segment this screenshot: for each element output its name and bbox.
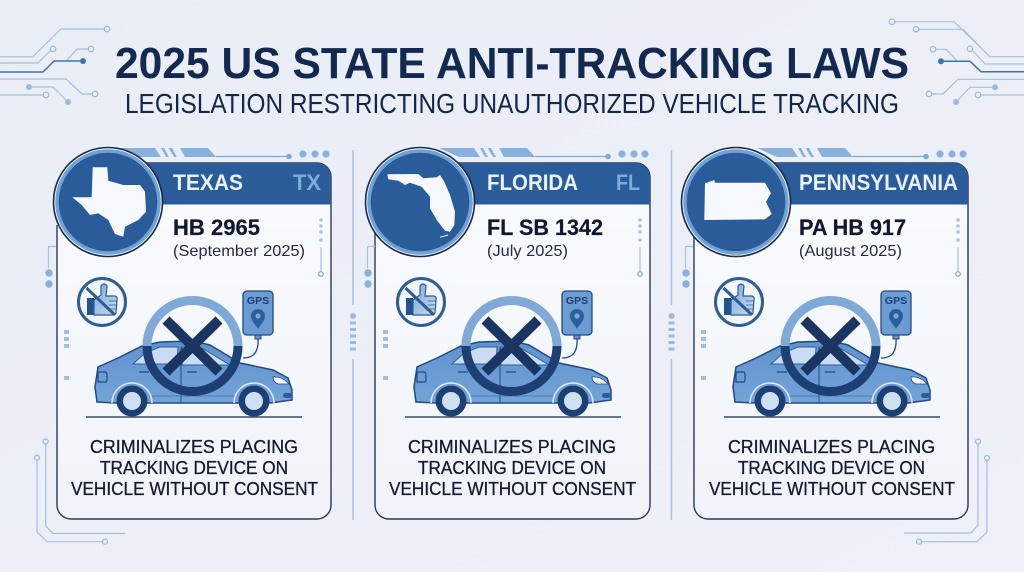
Pennsylvania card ornaments [682,148,967,380]
circuit decoration: bottom right [904,439,990,544]
Texas bill number: HB 2965 [173,215,260,240]
circuit decoration: top right [889,19,1024,105]
Pennsylvania header band [736,163,968,204]
title: 2025 US STATE ANTI-TRACKING LAWS [115,39,909,88]
GPS label: GPS [885,295,907,307]
icon: car with crossed-out GPS tracker [405,291,621,417]
Florida state name: FLORIDA [487,170,578,195]
Florida effective date: (July 2025) [487,243,568,260]
divider between Texas and Florida [350,150,356,520]
Pennsylvania description [709,437,955,499]
icon: car with crossed-out GPS tracker [86,291,302,417]
Florida header band [420,163,650,204]
panel: Texas [45,148,331,519]
Texas abbreviation: TX [293,170,321,195]
Florida bill number: FL SB 1342 [487,215,603,240]
Texas header band [108,163,331,204]
icon: car with crossed-out GPS tracker [724,291,940,417]
Pennsylvania description: VEHICLE WITHOUT CONSENT [709,479,955,499]
GPS label: GPS [247,295,269,307]
panel: Florida [364,148,650,519]
Texas card ornaments [45,148,330,380]
Florida description: CRIMINALIZES PLACING [408,437,616,457]
Texas card body [57,163,331,519]
Pennsylvania bill number: PA HB 917 [799,215,906,240]
icon: no thumbs up [716,278,762,326]
Pennsylvania card body [694,163,968,519]
Pennsylvania description: CRIMINALIZES PLACING [728,437,935,457]
Texas effective date: (September 2025) [173,243,305,260]
icon: Florida state badge [366,148,474,256]
Pennsylvania description: TRACKING DEVICE ON [738,458,925,478]
Florida description: TRACKING DEVICE ON [418,458,606,478]
Florida card body [375,163,650,519]
icon: Pennsylvania state badge [682,148,790,256]
GPS label: GPS [566,295,588,307]
Florida description [389,437,636,499]
subtitle: LEGISLATION RESTRICTING UNAUTHORIZED VEHICLE TRACKING [125,88,899,119]
Florida card ornaments [364,148,649,380]
Texas description: TRACKING DEVICE ON [100,458,288,478]
Pennsylvania state name: PENNSYLVANIA [799,170,958,195]
Texas description [71,437,318,499]
Pennsylvania effective date: (August 2025) [799,243,902,260]
icon: no thumbs up [78,278,126,326]
panel: Pennsylvania [682,148,968,519]
icon: no thumbs up [398,278,444,326]
Texas description: VEHICLE WITHOUT CONSENT [71,479,318,499]
circuit decoration: bottom left [34,439,125,544]
Texas description: CRIMINALIZES PLACING [90,437,298,457]
circuit decoration: top left [0,26,110,105]
divider between Florida and Pennsylvania [668,150,674,520]
Florida abbreviation: FL [616,170,640,195]
Florida description: VEHICLE WITHOUT CONSENT [389,479,636,499]
Texas state name: TEXAS [173,170,243,195]
icon: Texas state badge [54,148,162,256]
